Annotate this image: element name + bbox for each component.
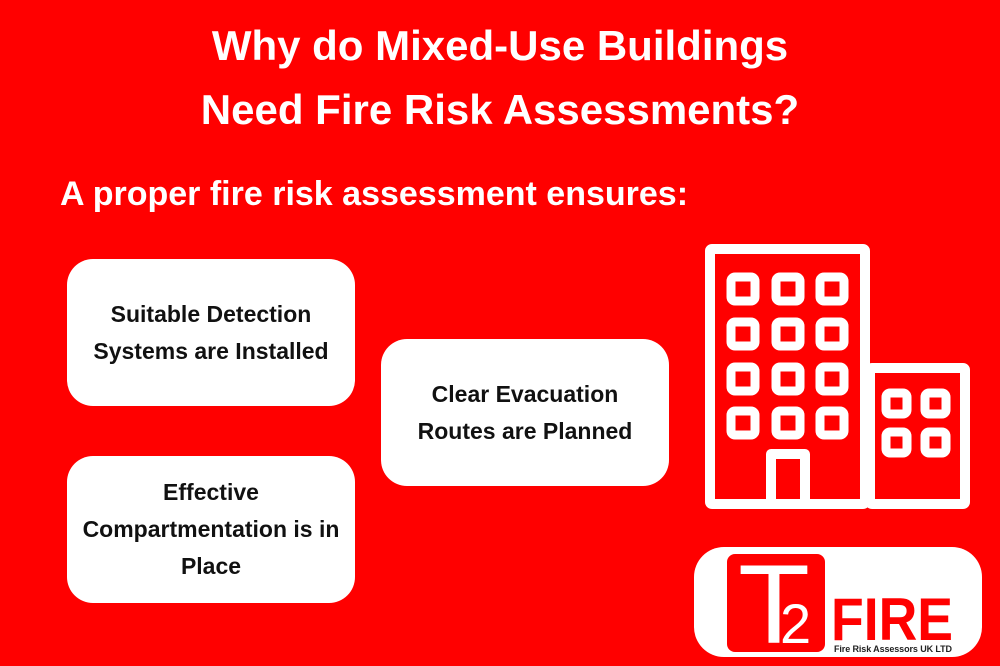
card: compartmentation — [67, 456, 355, 603]
title: Need Fire Risk Assessments? — [201, 86, 799, 133]
logo: T2 Fire: Fire Risk Assessors UK LTD — [834, 644, 952, 654]
logo: T2 Fire: 2 — [780, 592, 811, 655]
logo: T2 Fire: FIRE — [831, 586, 953, 653]
card: evacuation — [381, 339, 669, 486]
card: compartmentation: Effective — [163, 479, 259, 505]
card: evacuation: Clear Evacuation — [432, 380, 618, 406]
card: detection: Systems are Installed — [93, 338, 329, 364]
title — [201, 22, 799, 133]
title: Why do Mixed-Use Buildings — [212, 22, 788, 69]
logo: T2 Fire — [694, 547, 982, 657]
subtitle: A proper fire risk assessment ensures: — [60, 175, 688, 213]
card: compartmentation: Compartmentation is in — [83, 516, 339, 542]
card: detection — [67, 259, 355, 406]
card: detection: Suitable Detection — [111, 300, 311, 326]
card: compartmentation: Place — [181, 553, 241, 579]
card: evacuation: Routes are Planned — [418, 418, 632, 444]
